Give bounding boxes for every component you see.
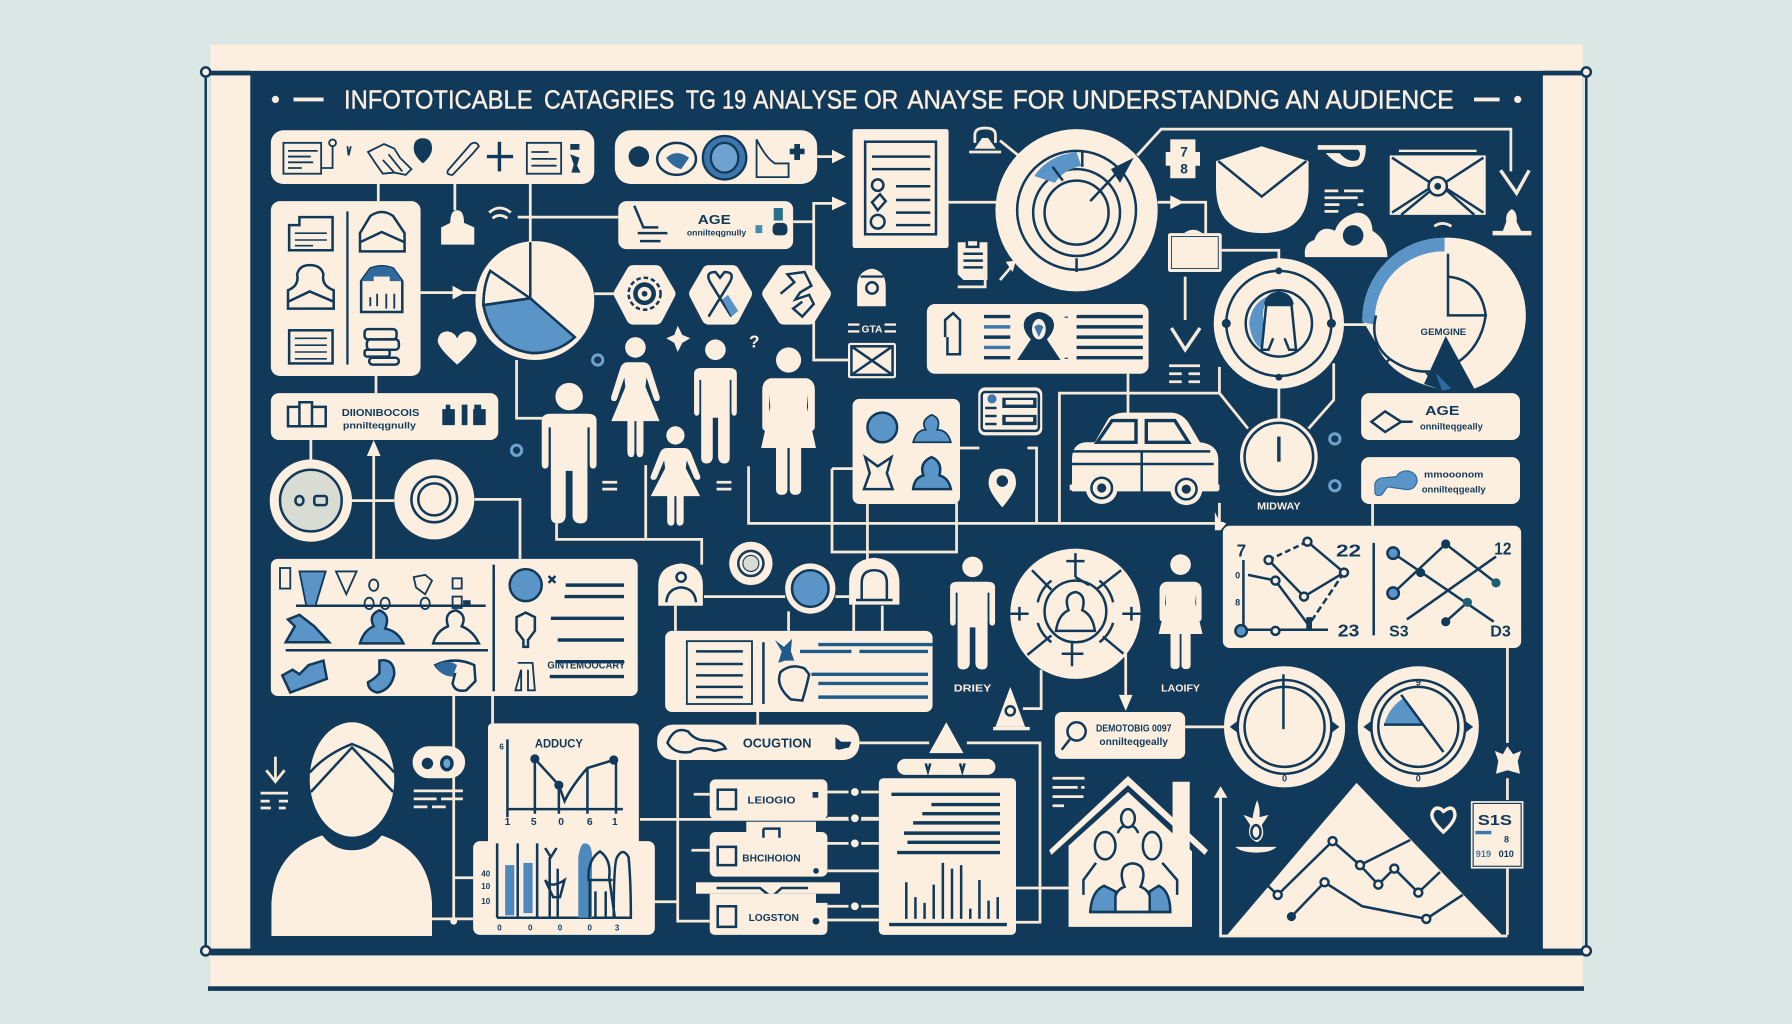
figure: girl <box>651 426 700 526</box>
chart: adducy line: 5 <box>531 817 537 828</box>
label: right values: 12 <box>1494 538 1511 558</box>
icon: drop <box>414 138 432 163</box>
icon: portrait <box>1017 312 1061 360</box>
icon: small document <box>1166 139 1200 178</box>
panel: row legend one <box>710 779 827 819</box>
icon: small tower <box>857 269 886 306</box>
panel: icon grid <box>271 201 421 376</box>
chart: bars <box>906 863 998 919</box>
chart: adducy line <box>488 723 639 846</box>
label: distribution: DIIONIBOCOIS <box>342 408 420 419</box>
text lines: left <box>984 317 1010 358</box>
axis: mountain baseline <box>1221 790 1507 936</box>
gauge: left <box>1224 666 1345 787</box>
title: INFOTOTICABLE <box>344 85 533 115</box>
icon: bars <box>442 405 486 425</box>
label: distribution detail: pnnilteqgnully <box>343 421 417 431</box>
icon: small ring node <box>729 542 773 585</box>
panel: icon strip two <box>615 130 817 184</box>
title: TG 19 <box>686 85 746 115</box>
icon: person lower <box>913 457 951 489</box>
text lines <box>891 794 1000 853</box>
icon: small id card <box>978 387 1042 435</box>
label: tower code <box>848 323 896 336</box>
label: occupation: OCUGTION <box>743 736 811 750</box>
node dots <box>850 787 860 911</box>
label: search title: DEMOTOBIG 0097 <box>1096 723 1171 734</box>
panel: occupation <box>657 725 859 760</box>
label: tool detail: onnilteqgeally <box>1422 485 1487 495</box>
icon: document with hook <box>283 139 351 174</box>
connector lines <box>311 129 1511 935</box>
icon: recycle hexagon <box>769 272 824 318</box>
icon: folder box <box>1168 230 1222 272</box>
icon: small figure <box>570 144 581 173</box>
label: right values: S3 <box>1389 624 1409 641</box>
icon: oval badge <box>657 143 696 175</box>
title <box>272 85 1521 115</box>
chart: adducy bars: 0 <box>558 923 563 932</box>
label: age detail: onnilteqgnully <box>687 227 747 237</box>
figure: man two <box>694 339 737 463</box>
icon: envelope large <box>1390 150 1486 215</box>
icon: toggle pill <box>413 746 465 778</box>
label: age: AGE <box>698 213 731 227</box>
icon: magnifier <box>1062 722 1086 750</box>
figure: woman right <box>1159 554 1203 669</box>
icon: sparkle <box>666 326 690 352</box>
icon: pill bar <box>897 759 995 775</box>
icon: eye <box>1318 145 1366 167</box>
chart: adducy bars: 10 <box>481 897 491 906</box>
icon: dial <box>1240 418 1318 496</box>
panel: icon strip one <box>271 130 594 184</box>
icon: gear hexagon <box>621 272 669 318</box>
panel: age row right <box>1361 393 1520 440</box>
panel: row legend three <box>710 894 827 935</box>
label: right values <box>1389 538 1511 641</box>
icon: shield envelope <box>1216 146 1309 233</box>
icon: person blue <box>913 415 951 442</box>
text lines: right side <box>550 585 624 677</box>
icon: hand <box>368 144 411 175</box>
chart: adducy line: 0 <box>558 817 564 828</box>
icon: star mark <box>775 639 794 663</box>
panel: mini table: 8 <box>1504 834 1509 844</box>
chart: target <box>995 129 1158 291</box>
icon: lock node <box>849 558 899 605</box>
icon: house with family <box>1049 776 1208 927</box>
panel: mini table: 919 <box>1476 849 1491 859</box>
label: left values: 22 <box>1336 541 1361 561</box>
panel: age row top <box>618 201 793 249</box>
icon: check column <box>871 179 886 229</box>
icon: stamp <box>969 128 1001 152</box>
icon: star <box>1495 746 1521 774</box>
label: tower code: GTA <box>862 325 883 336</box>
icon: blue circle <box>867 413 897 442</box>
label: search detail: onnilteqgeally <box>1099 737 1169 748</box>
panel: row legend two <box>710 822 827 877</box>
icon: stacked coins <box>365 329 399 365</box>
chart: adducy line: 6 <box>499 743 504 752</box>
panel: id card <box>927 304 1149 374</box>
label: left values <box>1235 541 1361 641</box>
label: age: AGE <box>1425 404 1459 418</box>
chart: adducy line: ADDUCY <box>535 736 583 750</box>
panel: document <box>853 129 949 248</box>
label: house notes <box>1053 778 1085 806</box>
gauge: left: 0 <box>1282 774 1287 784</box>
figure: audience portrait <box>271 722 432 936</box>
label: donut center: GEMGINE <box>1421 327 1466 337</box>
chart: pie <box>475 241 594 360</box>
gauge: right: 0 <box>1416 774 1421 784</box>
icon: heart <box>438 331 477 365</box>
icon: bow <box>864 457 893 489</box>
label: dial: MIDWAY <box>1257 502 1301 513</box>
panel: distribution row <box>271 393 498 440</box>
icon: ring circle <box>394 459 474 539</box>
chart: donut <box>1362 223 1526 391</box>
icon: small flourish <box>549 576 555 583</box>
icon: shoe <box>757 139 789 177</box>
icon: status marks <box>755 208 787 235</box>
icon: small star <box>835 737 851 750</box>
label: row two: BHCIHOION <box>742 854 801 865</box>
label: woman right: LAOIFY <box>1161 683 1201 694</box>
panel: report <box>879 778 1016 935</box>
icon: middle row people <box>286 610 479 643</box>
icon: gate <box>515 663 535 690</box>
icon: lined note <box>289 330 333 363</box>
icon: clover <box>790 144 805 160</box>
icon: triangle mark <box>929 722 963 753</box>
title: FOR UNDERSTANDNG AN AUDIENCE <box>1013 85 1454 115</box>
icon: bust outline <box>288 265 334 309</box>
icon: bottom row shapes <box>282 660 475 693</box>
label: right values: D3 <box>1490 624 1511 641</box>
icon: bandage <box>447 143 479 175</box>
icon: small envelope <box>848 343 896 378</box>
label: left values: 23 <box>1338 621 1359 641</box>
icon: document two <box>527 143 561 174</box>
title: ANALYSE OR <box>753 85 898 115</box>
icon: portrait target <box>1214 258 1344 389</box>
icon: face circle <box>270 459 352 542</box>
chart: right network <box>1387 538 1511 641</box>
chart: adducy line: 1 <box>505 817 511 828</box>
icon: car <box>1070 413 1219 505</box>
icon: tool <box>667 730 726 752</box>
icon: down arrow <box>261 757 288 808</box>
panel: audience grid <box>271 559 638 696</box>
icon: pin <box>989 469 1016 507</box>
text lines: right <box>800 645 933 697</box>
icon: heart outline <box>1432 808 1455 832</box>
label: row one: LEIOGIO <box>747 795 795 806</box>
label: small lines <box>1325 191 1363 211</box>
icon: blue node <box>785 563 835 614</box>
chart: adducy bars: 0 <box>587 923 592 932</box>
figure: man one <box>542 383 597 523</box>
gauge: right <box>1358 666 1479 787</box>
panel: central figures <box>853 399 960 504</box>
figure: man right <box>950 557 995 669</box>
chart: adducy bars: 0 <box>528 923 533 932</box>
icon: clipboard <box>958 240 987 287</box>
chart: adducy line: 6 <box>587 817 593 828</box>
label: pill notes <box>414 791 463 807</box>
text lines: right <box>1066 317 1143 359</box>
icon: flame <box>1235 800 1277 853</box>
chart: adducy bars: 0 <box>497 923 502 932</box>
icon: bottle <box>945 313 960 354</box>
icon: gender wheel <box>1010 549 1141 679</box>
icon: blue blob <box>666 153 689 169</box>
figure: woman one <box>611 337 660 457</box>
title: CATAGRIES <box>544 85 674 115</box>
label: man right: DRIEY <box>954 683 992 694</box>
label: row three: LOGSTON <box>749 913 799 924</box>
arrow: chevrons <box>1171 170 1529 350</box>
icon: blue ring <box>703 136 746 179</box>
chart: adducy bars: 40 <box>481 870 491 879</box>
icon: helmet <box>779 666 809 701</box>
label: panel caption: GINTEMOOCARY <box>547 661 626 672</box>
icon: top row symbols <box>280 568 470 609</box>
poster frame <box>201 45 1591 991</box>
icon: blue dots <box>511 355 1340 491</box>
icon: wifi <box>489 208 511 218</box>
label: equals signs <box>602 482 731 489</box>
label: age detail: onnilteqgeally <box>1420 422 1484 432</box>
icon: plus <box>487 142 513 171</box>
panel: mini table: 010 <box>1499 849 1514 859</box>
panel: mini table: S1S <box>1478 813 1512 829</box>
gauge: right: 9 <box>1416 678 1421 688</box>
chart: adducy bars: 3 <box>615 923 620 932</box>
icon: key <box>1375 471 1417 496</box>
icon: small document: 7 <box>1180 145 1188 160</box>
icon: globe <box>629 146 649 167</box>
icon: dark box <box>361 266 402 312</box>
icon: cloud <box>1305 213 1387 257</box>
panel: divider bar <box>696 882 840 897</box>
label: left values: 7 <box>1237 541 1246 561</box>
panel: central document <box>665 631 933 712</box>
panel: numeric chart <box>1223 526 1521 648</box>
icon: cone <box>993 687 1030 730</box>
chart: adducy bars <box>473 841 655 935</box>
chart: adducy line: 1 <box>612 817 618 828</box>
icon: bag <box>441 210 474 245</box>
icon: cap <box>360 212 405 251</box>
icon: person node <box>658 563 703 606</box>
label: question mark: ? <box>749 331 760 351</box>
icon: ribbon hexagon <box>696 272 745 318</box>
node dot <box>450 918 457 925</box>
icon: buildings <box>288 402 326 426</box>
title: ANAYSE <box>907 85 1003 115</box>
chart: mountain line <box>1226 783 1503 936</box>
icon: inner ring <box>711 143 738 173</box>
panel: tool row right <box>1361 457 1520 504</box>
icon: right blue circle <box>510 569 542 601</box>
panel: mini table <box>1471 801 1523 869</box>
icon: flower <box>517 613 535 647</box>
icon: small document: 8 <box>1180 162 1188 177</box>
figure: woman two <box>761 347 816 495</box>
chart: left network <box>1235 538 1361 641</box>
icon: pawn <box>1493 209 1531 235</box>
label: left values: 0 <box>1235 570 1240 580</box>
icon: plane <box>1371 411 1413 432</box>
panel: search <box>1055 712 1185 759</box>
icon: folder <box>289 217 333 250</box>
chart: adducy bars: 10 <box>481 882 491 891</box>
label: left values: 8 <box>1235 598 1240 608</box>
label: folder marks <box>1169 366 1200 382</box>
arrowheads <box>367 150 1227 798</box>
icon: mower <box>634 206 667 241</box>
icon: family <box>1083 809 1177 912</box>
label: tool name: mmooonom <box>1424 470 1483 480</box>
